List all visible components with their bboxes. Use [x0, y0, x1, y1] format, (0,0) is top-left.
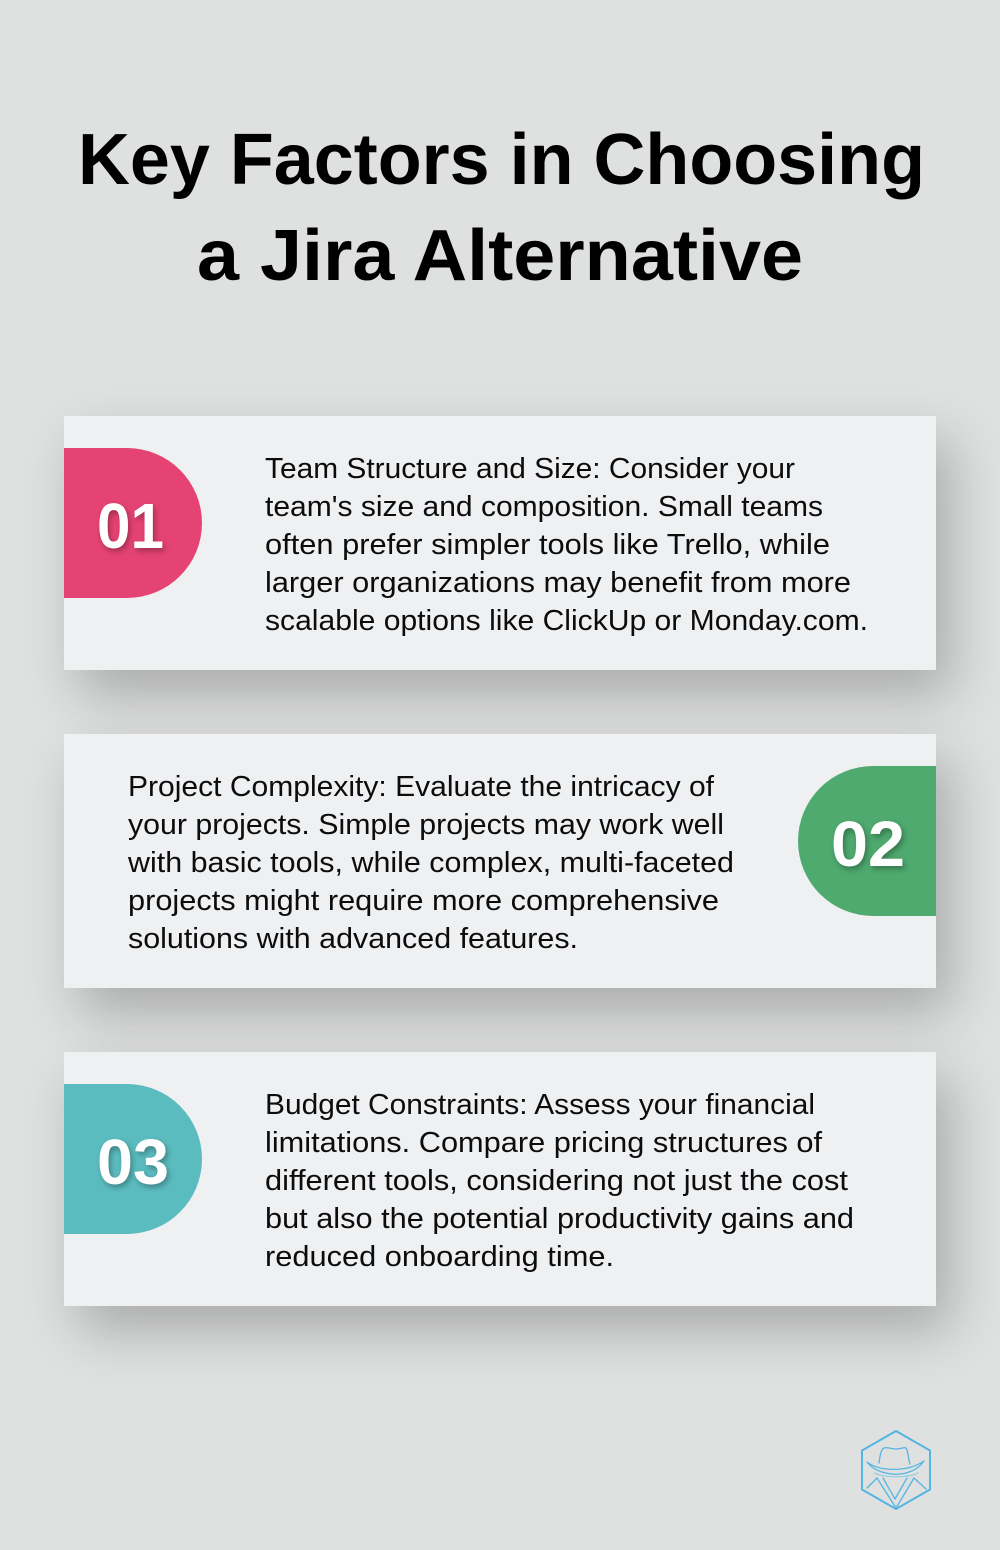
text block: project complexity: solutions with advanced features.	[128, 923, 578, 955]
text block: budget constraints: reduced onboarding time.	[265, 1241, 614, 1273]
text block: team structure: team's size and composition. Small teams	[265, 491, 823, 523]
title	[78, 120, 925, 296]
badge number 02: 02	[831, 808, 905, 880]
text block: budget constraints: but also the potential productivity gains and	[265, 1203, 854, 1235]
panel: card 2 background	[64, 734, 936, 988]
badge 03 shape	[64, 1084, 202, 1234]
text block: budget constraints: different tools, considering not just the cost	[265, 1165, 848, 1197]
text block: team structure: larger organizations may benefit from more	[265, 567, 851, 599]
badge number 03: 03	[97, 1126, 169, 1198]
text block: budget constraints: limitations. Compare pricing structures of	[265, 1127, 823, 1159]
title: Key Factors in Choosing	[78, 120, 925, 200]
text block: team structure: scalable options like ClickUp or Monday.com.	[265, 605, 868, 637]
title: a Jira Alternative	[197, 216, 803, 296]
text block: project complexity: projects might require more comprehensive	[128, 885, 719, 917]
text block: project complexity: Project Complexity: Evaluate the intricacy of	[128, 771, 715, 803]
badge 02 shape	[798, 766, 936, 916]
badge number 01: 01	[97, 490, 164, 562]
text block: project complexity	[127, 771, 734, 955]
text block: project complexity: your projects. Simple projects may work well	[128, 809, 724, 841]
text block: project complexity: with basic tools, while complex, multi-faceted	[127, 847, 734, 879]
text block: budget constraints	[265, 1089, 854, 1273]
text block: team structure: Team Structure and Size: Consider your	[265, 453, 795, 485]
badge 01 shape	[64, 448, 202, 598]
panel: card 1 background	[64, 416, 936, 670]
panel: card 3 background	[64, 1052, 936, 1306]
text block: team structure: often prefer simpler tools like Trello, while	[265, 529, 830, 561]
text block: budget constraints: Budget Constraints: Assess your financial	[265, 1089, 815, 1121]
text block: team structure	[265, 453, 868, 637]
icon: logo hexagon with hat figure	[862, 1431, 930, 1509]
